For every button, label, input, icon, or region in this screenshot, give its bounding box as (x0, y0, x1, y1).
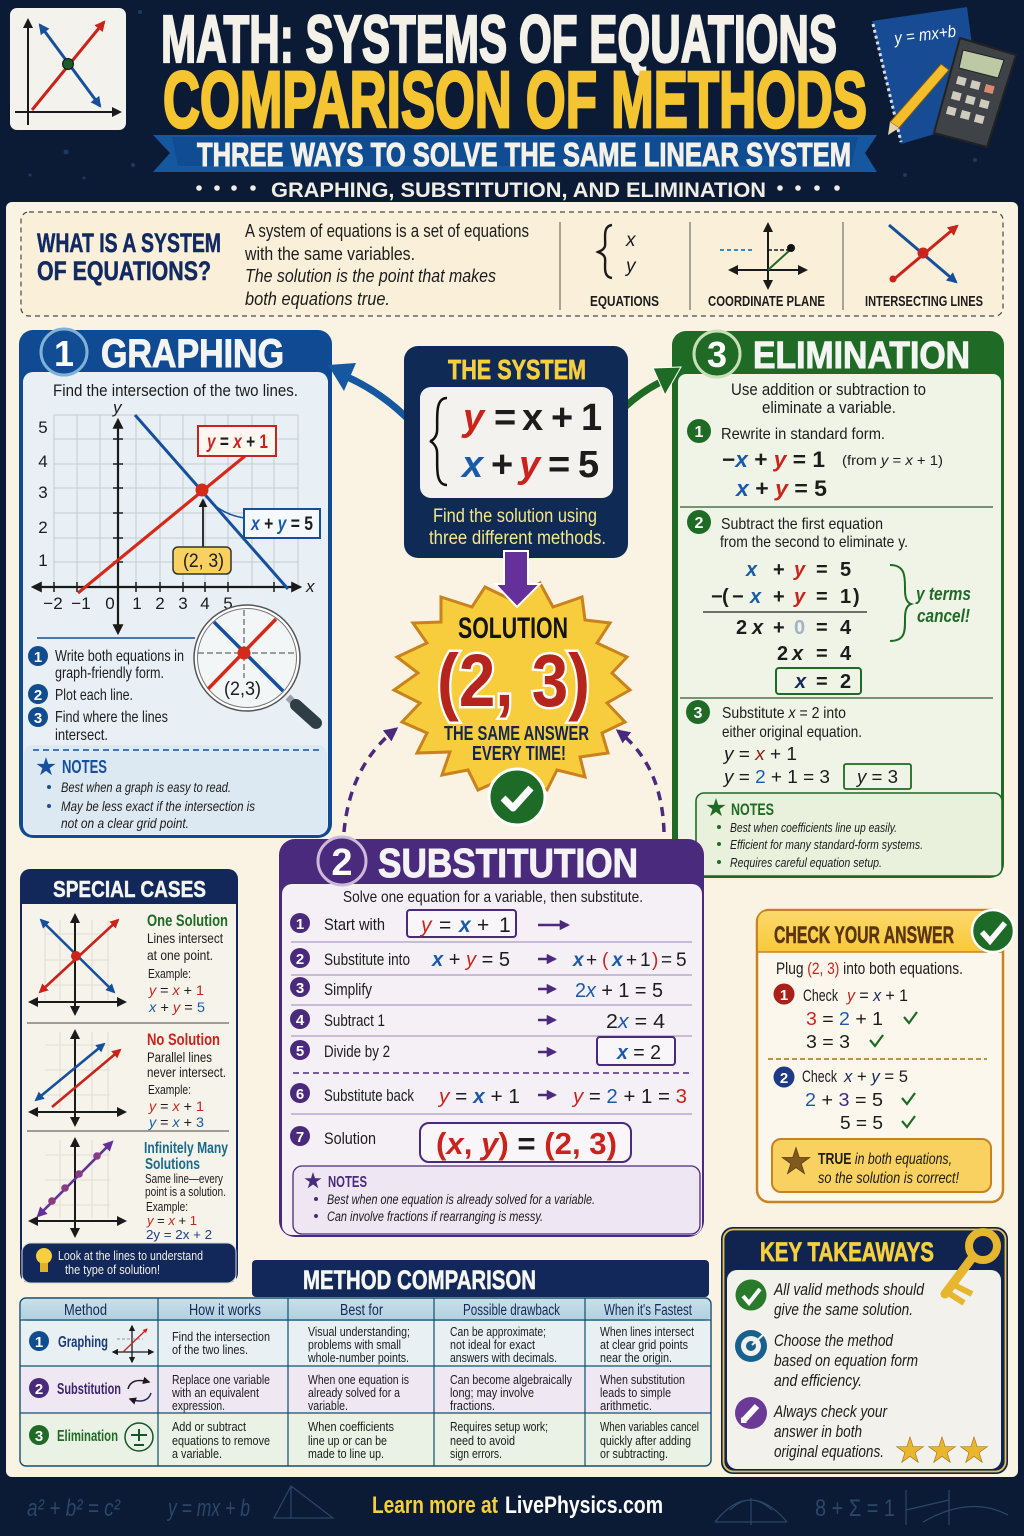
icon: intersecting lines (865, 225, 983, 310)
steps 1 to 7: 3 (296, 980, 304, 997)
icon: magnifying glass (194, 605, 316, 723)
row: substitution: long; may involve (450, 1386, 534, 1400)
steps 1 to 7: 4 (296, 1012, 305, 1029)
case: one solution (30, 911, 228, 1015)
check steps: Check (802, 1068, 838, 1086)
arrow: substitution to solution right (618, 731, 664, 832)
callout: look at the lines: the type of solution! (65, 1263, 160, 1277)
notes: graphing: NOTES (62, 757, 107, 777)
row: elimination: 3 (35, 1428, 43, 1445)
row: substitution: When substitution (600, 1373, 685, 1387)
step 1: 1 (695, 424, 704, 441)
chart: two lines intersecting: −2 (43, 594, 63, 613)
case: one solution: x + y = 5 (148, 999, 205, 1015)
step 2 (687, 510, 971, 694)
step 2: cancel! (917, 606, 970, 626)
row: elimination: Requires setup work; (450, 1420, 548, 1434)
equations box (420, 387, 613, 498)
check steps: x + y = 5 (843, 1068, 908, 1086)
icon: notebook, pencil and calculator: y = mx+b (892, 22, 957, 48)
row: elimination: Add or subtract (172, 1420, 246, 1434)
chart: two lines intersecting: 4 (200, 594, 210, 613)
steps list: Plot each line. (55, 687, 133, 704)
row: substitution: expression. (172, 1399, 225, 1413)
badge: solution starburst: (2, 3) (437, 639, 590, 722)
chart: two lines intersecting: y (112, 398, 123, 417)
row: graphing: Visual understanding; (308, 1325, 410, 1339)
case: one solution: Example: (148, 966, 191, 981)
step 3: y = x + 1 (722, 744, 797, 764)
row: elimination: made to line up. (308, 1447, 384, 1461)
panel: graphing (19, 329, 332, 838)
table header row: Method (64, 1302, 107, 1319)
header: graphing: 1 (54, 333, 74, 374)
steps 1 to 7: 1 (296, 916, 304, 933)
label: solution point (173, 547, 231, 574)
chart: two lines intersecting: 2 (38, 518, 48, 537)
step 3: y = 2 + 1 = 3 (722, 767, 830, 787)
steps 1 to 7: Substitute back (324, 1087, 415, 1105)
steps 1 to 7: Simplify (324, 981, 373, 999)
heading: what is a system (37, 228, 221, 286)
check steps: Plug (2, 3) into both equations. (776, 960, 963, 978)
chart: two lines intersecting: 5 (38, 418, 48, 437)
row: substitution: Replace one variable (172, 1373, 270, 1387)
takeaway: choose method: and efficiency. (774, 1371, 862, 1390)
step 1 (687, 419, 943, 501)
notes: substitution: Best when one equation is already solved for a variable. (327, 1192, 595, 1207)
step 1: (from y = x + 1) (842, 452, 943, 468)
row: elimination: quickly after adding (600, 1434, 691, 1448)
step 2: y terms (915, 584, 971, 604)
case: no solution: Example: (148, 1082, 191, 1097)
chart: two lines intersecting: 5 (223, 594, 233, 613)
definition text: with the same variables. (244, 244, 415, 264)
check steps: 3 = 3 (806, 1032, 850, 1052)
intro text: Find the intersection of the two lines. (53, 381, 298, 400)
label: y = x + 1: y = x + 1 (206, 432, 268, 453)
panel: what is a system of equations (21, 212, 1003, 316)
step 1: x + y = 5 (735, 476, 827, 501)
row: elimination: need to avoid (450, 1434, 515, 1448)
notes: elimination: NOTES (731, 800, 774, 819)
equations box: x+y=5 (460, 444, 599, 486)
steps 1 to 7: x + y = 5 (431, 949, 510, 971)
header: substitution: SUBSTITUTION (378, 840, 638, 886)
steps list: intersect. (55, 727, 108, 744)
case: no solution: y = x + 1 (148, 1098, 204, 1114)
row: substitution: already solved for a (308, 1386, 400, 1400)
definition text: A system of equations is a set of equations (245, 221, 529, 241)
icon: magnifying glass: (2,3) (224, 679, 261, 700)
icon: equations: EQUATIONS (590, 293, 659, 310)
steps list: graph-friendly form. (55, 665, 164, 682)
panel: special cases (20, 869, 238, 1283)
heading: special cases: SPECIAL CASES (53, 876, 206, 902)
step 2: 2x =4 (777, 643, 852, 665)
header: substitution: 2 (331, 842, 353, 884)
row: elimination: or subtracting. (600, 1447, 668, 1461)
row: graphing: near the origin. (600, 1351, 672, 1365)
label: solution point: (2, 3) (183, 551, 224, 572)
row: substitution: arithmetic. (600, 1399, 652, 1413)
takeaway: choose method: Choose the method (774, 1331, 893, 1350)
notes: graphing: May be less exact if the intersection is (61, 798, 255, 814)
check steps: y = x + 1 (846, 987, 908, 1005)
takeaway: same solution: All valid methods should (773, 1280, 924, 1299)
notes: substitution: NOTES (328, 1174, 367, 1191)
step 2: x + y =5 (745, 559, 851, 581)
steps list: Write both equations in (55, 648, 184, 665)
row: elimination: sign errors. (450, 1447, 502, 1461)
steps 1 to 7: Divide by 2 (324, 1043, 390, 1061)
steps 1 to 7: y = 2 + 1 = 3 (571, 1086, 687, 1108)
row: substitution: Substitution (57, 1381, 121, 1398)
icon: key (945, 1232, 997, 1303)
intro text (731, 381, 926, 417)
check steps (768, 960, 987, 1133)
steps 1 to 7: Solution (324, 1130, 376, 1148)
row: substitution (29, 1373, 685, 1413)
panel: elimination (672, 331, 1004, 878)
badge: solution starburst (394, 583, 630, 825)
label: x + y = 5 (244, 509, 320, 538)
arrow: system to solution (495, 551, 540, 607)
steps 1 to 7: 2x = 4 (606, 1011, 665, 1033)
notes: elimination: Requires careful equation setup. (730, 855, 882, 870)
row: substitution: with an equivalent (171, 1386, 259, 1400)
steps list: 1 (34, 649, 42, 666)
row: graphing: problems with small (308, 1338, 401, 1352)
notes: graphing (36, 757, 255, 831)
check steps: 2 + 3 = 5 (805, 1090, 883, 1110)
footer: learn more: Learn more at (372, 1492, 498, 1519)
takeaway: always check: original equations. (774, 1442, 884, 1461)
header: elimination (694, 331, 970, 377)
header: graphing (41, 329, 284, 376)
case: infinitely many solutions: Solutions (145, 1156, 200, 1173)
callout: look at the lines: Look at the lines to understand (58, 1249, 203, 1263)
footer: faint chalk formulas: y = mx + b (167, 1495, 250, 1522)
badge: solution starburst: THE SAME ANSWER (444, 723, 589, 745)
step 2: −(− x + y =1) (711, 586, 860, 608)
case: no solution: y = x + 3 (148, 1114, 204, 1130)
steps 1 to 7: 7 (296, 1129, 304, 1146)
icon: intersecting lines graph (10, 8, 126, 130)
row: graphing: 1 (35, 1334, 43, 1351)
chart: two lines intersecting: 4 (38, 452, 48, 471)
notes: elimination: Efficient for many standard-form systems. (730, 837, 923, 852)
case: no solution (30, 1030, 226, 1130)
subtitle banner: THREE WAYS TO SOLVE THE SAME LINEAR SYSTEM (197, 136, 851, 173)
comparison table (20, 1298, 711, 1466)
callout: true in both equations: so the solution is correct! (818, 1170, 959, 1187)
icon: intersecting lines: INTERSECTING LINES (865, 293, 983, 310)
check steps: Check (803, 987, 839, 1005)
row: substitution: variable. (308, 1399, 348, 1413)
steps 1 to 7: y = x + 1 (437, 1086, 520, 1108)
row: graphing: Graphing (58, 1334, 108, 1351)
footer: learn more (372, 1492, 663, 1519)
heading: key takeaways: KEY TAKEAWAYS (760, 1237, 934, 1267)
arrows: step flow (538, 925, 568, 1095)
step 1: Rewrite in standard form. (721, 426, 885, 443)
takeaway: always check: Always check your (773, 1402, 888, 1421)
steps 1 to 7: 5 (296, 1043, 304, 1060)
footer: learn more: LivePhysics.com (505, 1492, 663, 1519)
title (161, 2, 867, 144)
takeaway: same solution (736, 1280, 924, 1319)
case: one solution: One Solution (147, 911, 228, 930)
row: elimination: Elimination (57, 1428, 118, 1445)
case: infinitely many solutions: y = x + 1 (146, 1213, 197, 1228)
definition text: both equations true. (245, 289, 390, 309)
steps 1 to 7: x = 2 (616, 1042, 661, 1064)
table header row: When it's Fastest (604, 1302, 693, 1319)
case: one solution: Lines intersect (147, 930, 223, 946)
solution box: (x, y) = (2, 3) (436, 1126, 617, 1161)
icon: coordinate plane (708, 224, 825, 310)
notes: graphing: Best when a graph is easy to read. (61, 779, 231, 795)
step 2: x =2 (794, 671, 851, 693)
sub-heading: GRAPHING, SUBSTITUTION, AND ELIMINATION (271, 179, 766, 202)
panel: substitution (279, 837, 704, 1237)
chart: two lines intersecting: 0 (105, 594, 115, 613)
case: no solution: never intersect. (147, 1064, 226, 1080)
steps list: Find where the lines (55, 709, 168, 726)
notes: elimination: Best when coefficients line up easily. (730, 820, 897, 835)
callout: true in both equations: TRUE in both equations, (818, 1151, 952, 1168)
takeaway: always check: answer in both (774, 1422, 862, 1441)
row: substitution: leads to simple (600, 1386, 671, 1400)
row: graphing: at clear grid points (600, 1338, 688, 1352)
icon: equations (590, 225, 659, 310)
step 3: Substitute x = 2 into (722, 705, 846, 722)
heading: method comparison (252, 1260, 709, 1297)
row: elimination: equations to remove (172, 1434, 270, 1448)
row: elimination (29, 1420, 699, 1461)
panel: the system: three different methods. (429, 528, 606, 549)
takeaway: choose method (735, 1330, 918, 1390)
heading: what is a system: OF EQUATIONS? (37, 256, 211, 286)
steps list: 3 (34, 710, 42, 727)
step 3: 3 (694, 705, 703, 722)
panel: check your answer (757, 910, 1014, 1202)
icon: equations: x (625, 230, 637, 251)
chart: two lines intersecting: 2 (155, 594, 165, 613)
row: substitution: fractions. (450, 1399, 495, 1413)
takeaway: same solution: give the same solution. (774, 1300, 913, 1319)
takeaway: choose method: based on equation form (774, 1351, 918, 1370)
row: substitution: Can become algebraically (450, 1373, 573, 1387)
check steps: 5 = 5 (840, 1113, 883, 1133)
step 2: from the second to eliminate y. (720, 534, 908, 551)
footer: faint chalk formulas: a² + b² = c² (27, 1495, 121, 1522)
label: x + y = 5: x + y = 5 (250, 514, 313, 535)
header: elimination: 3 (707, 334, 727, 375)
panel: key takeaways (721, 1227, 1008, 1474)
row: substitution: 2 (35, 1381, 43, 1398)
steps list: 2 (34, 687, 42, 704)
header: substitution (318, 837, 638, 886)
arrow: to graphing (328, 363, 412, 423)
notes: substitution (293, 1166, 700, 1234)
intro text: Solve one equation for a variable, then substitute. (343, 889, 643, 906)
step 2: 2x + 0 =4 (736, 617, 852, 639)
header: elimination: ELIMINATION (753, 335, 970, 377)
panel: the system: THE SYSTEM (448, 354, 586, 385)
row: substitution: When one equation is (308, 1373, 409, 1387)
icon: check (489, 769, 545, 825)
icon: coordinate plane: COORDINATE PLANE (708, 293, 825, 310)
row: graphing (29, 1325, 694, 1365)
notes: graphing: not on a clear grid point. (61, 815, 189, 831)
row: graphing: whole-number points. (307, 1351, 409, 1365)
chart: two lines intersecting: 1 (132, 594, 142, 613)
steps 1 to 7: 6 (296, 1086, 304, 1103)
step 2: Subtract the first equation (721, 516, 883, 533)
intro text: Use addition or subtraction to (731, 381, 926, 399)
steps 1 to 7: Subtract 1 (324, 1012, 385, 1030)
takeaway: always check (735, 1397, 888, 1461)
case: infinitely many solutions: 2y = 2x + 2 (146, 1227, 212, 1242)
icon: green check (972, 910, 1014, 952)
heading: method comparison: METHOD COMPARISON (303, 1265, 536, 1295)
steps 1 to 7: 2 (296, 951, 304, 968)
case: one solution: at one point. (147, 947, 213, 963)
chart: two lines intersecting: 3 (178, 594, 188, 613)
icon: light bulb (36, 1248, 52, 1272)
chart: two lines intersecting: −1 (71, 594, 91, 613)
footer: faint chalk formulas: 8 + Σ = 1 (815, 1495, 895, 1522)
icon: notebook, pencil and calculator (872, 7, 1016, 147)
notes: elimination (696, 793, 1002, 876)
badge: solution starburst: EVERY TIME! (472, 743, 566, 765)
case: infinitely many solutions: Same line—every (145, 1172, 224, 1186)
steps 1 to 7: x+ (x+1)=5 (572, 950, 687, 971)
callout: look at the lines (22, 1243, 236, 1283)
step 3 (686, 700, 911, 789)
table header row: Possible drawback (463, 1302, 560, 1319)
steps 1 to 7: Start with (324, 916, 385, 934)
row: elimination: line up or can be (308, 1434, 387, 1448)
step 2: 2 (695, 515, 704, 532)
row: elimination: When variables cancel (600, 1420, 699, 1434)
badge: solution starburst: SOLUTION (458, 612, 568, 645)
heading: what is a system: WHAT IS A SYSTEM (37, 228, 221, 258)
row: graphing: not ideal for exact (450, 1338, 535, 1352)
case: infinitely many solutions (30, 1139, 228, 1242)
row: graphing: When lines intersect (600, 1325, 694, 1339)
case: infinitely many solutions: Example: (146, 1200, 188, 1214)
row: graphing: Can be approximate; (450, 1325, 546, 1339)
chart: two lines intersecting (33, 398, 320, 633)
steps 1 to 7: Substitute into (324, 951, 410, 969)
notes: substitution: Can involve fractions if rearranging is messy. (327, 1209, 543, 1224)
row: elimination: When coefficients (308, 1420, 394, 1434)
case: no solution: Parallel lines (147, 1049, 212, 1065)
definition text: The solution is the point that makes (245, 266, 496, 286)
case: infinitely many solutions: Infinitely Many (144, 1140, 228, 1157)
case: infinitely many solutions: point is a solution. (145, 1185, 226, 1199)
label: y = x + 1 (198, 426, 276, 456)
icon: equations: y (624, 256, 637, 277)
steps 1 to 7: y = x +1 (419, 914, 511, 937)
panel: method comparison (20, 1260, 711, 1466)
check steps: 3 = 2 + 1 (806, 1009, 883, 1029)
chart: two lines intersecting: 1 (38, 551, 48, 570)
step 3: y = 3 (855, 767, 898, 787)
panel: the system: Find the solution using (433, 506, 597, 527)
steps list (28, 646, 184, 744)
case: one solution: y = x + 1 (148, 982, 204, 998)
arrow: to elimination (619, 367, 681, 413)
footer: faint chalk formulas (27, 1486, 1008, 1525)
equations box: y =x+1 (461, 397, 602, 439)
row: graphing: of the two lines. (172, 1343, 248, 1357)
check steps: 1 (780, 987, 788, 1004)
row: graphing: Find the intersection (172, 1330, 270, 1344)
check steps: 2 (780, 1070, 788, 1087)
chart: two lines intersecting: 3 (38, 483, 48, 502)
chart: two lines intersecting: x (305, 577, 315, 596)
table header row: How it works (189, 1302, 261, 1319)
icon: three stars (897, 1437, 987, 1462)
panel: the system (404, 346, 628, 558)
row: graphing: answers with decimals. (450, 1351, 557, 1365)
table header row: Best for (340, 1302, 383, 1319)
table header row (64, 1302, 693, 1319)
case: no solution: No Solution (147, 1030, 220, 1049)
header: graphing: GRAPHING (101, 332, 284, 376)
definition text (244, 221, 529, 309)
steps 1 to 7 (290, 910, 687, 1162)
row: elimination: a variable. (172, 1447, 222, 1461)
callout: true in both equations (772, 1139, 991, 1192)
arrow: substitution to solution left (344, 729, 396, 832)
step 3: either original equation. (722, 724, 862, 741)
step 1: −x + y = 1 (722, 447, 825, 472)
intro text: eliminate a variable. (762, 399, 896, 417)
steps 1 to 7: 2x + 1 = 5 (575, 980, 663, 1002)
